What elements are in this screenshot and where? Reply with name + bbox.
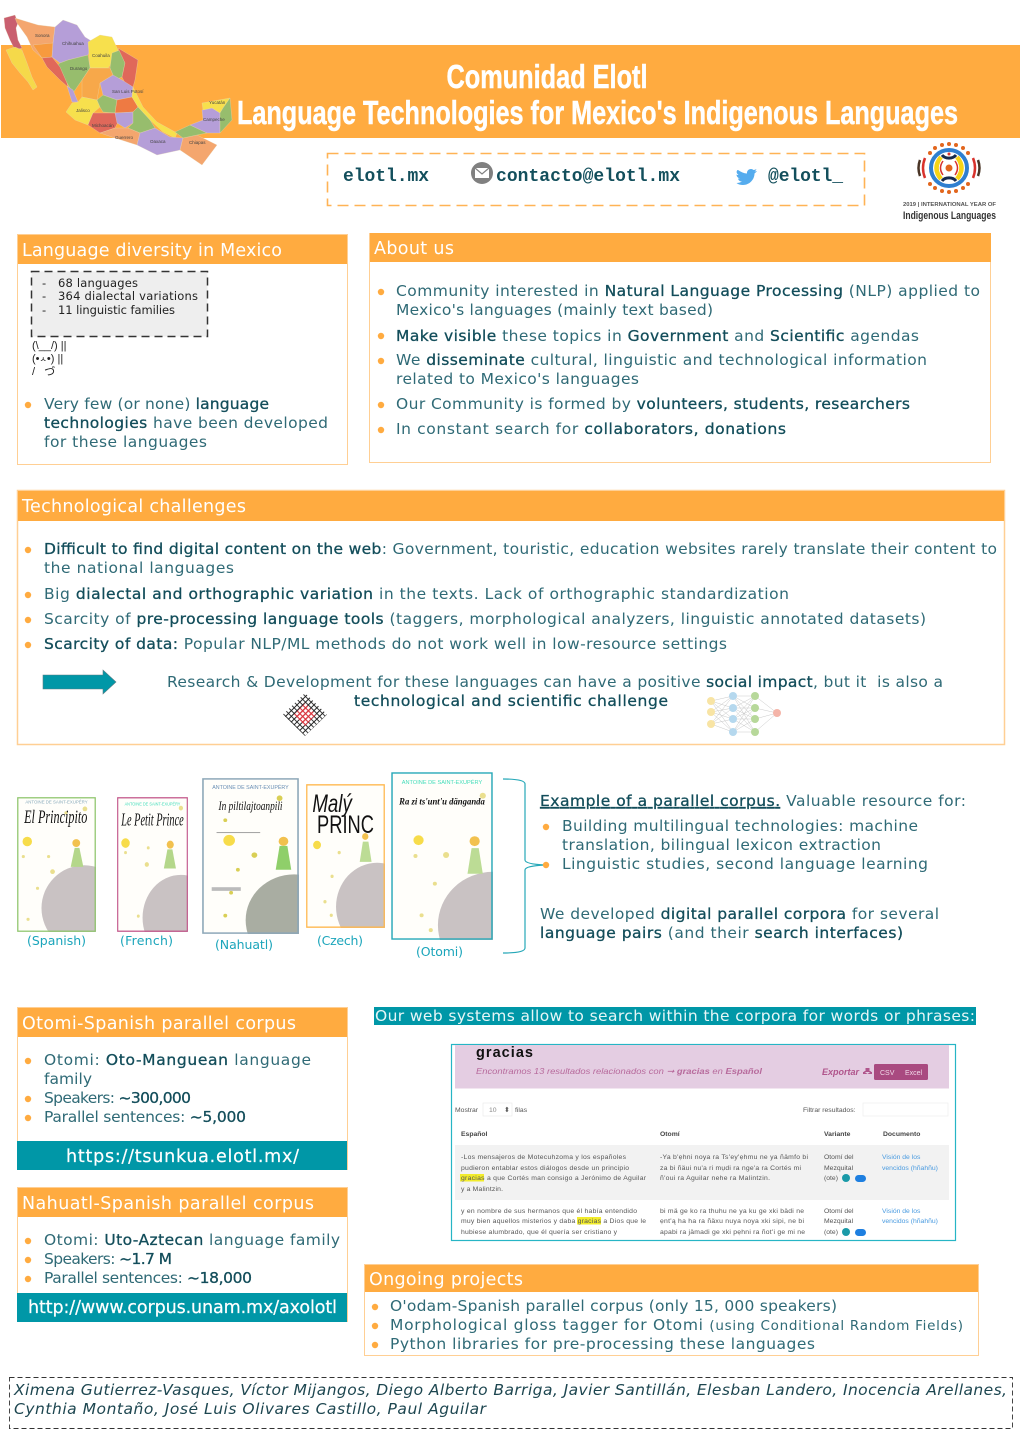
table: y en nombre de sus hermanos que él había entendido xyxy=(461,1208,637,1215)
map of Mexico: Chiapas xyxy=(189,140,206,145)
panel: about us xyxy=(370,233,991,462)
book: Spanish xyxy=(17,797,127,951)
panel: Nahuatl-Spanish corpus xyxy=(17,1188,348,1322)
book: Czech xyxy=(306,784,418,951)
map of Mexico: Oaxaca xyxy=(150,139,166,144)
panel: Otomi-Spanish corpus: family xyxy=(44,1070,92,1088)
arrow xyxy=(43,670,116,694)
contact box: @elotl_ xyxy=(768,167,843,187)
table: Mezquital xyxy=(824,1218,854,1225)
map of Mexico: Coahuila xyxy=(92,53,110,58)
logo: International Year of Indigenous Languages: Indigenous Languages xyxy=(903,210,996,222)
contact box xyxy=(328,154,864,206)
bullet text: technologies have been developed xyxy=(44,414,328,432)
dashed stats box: 68 languages xyxy=(58,276,138,290)
map of Mexico: Campeche xyxy=(203,117,225,122)
panel: about us: related to Mexico's languages xyxy=(396,370,639,388)
panel: about us: In constant search for collaborators, donations xyxy=(396,420,786,438)
authors: Cynthia Montaño, José Luis Olivares Castillo, Paul Aguilar xyxy=(14,1400,488,1418)
table: Otomí xyxy=(660,1131,681,1138)
icon: embroidery diamond xyxy=(283,693,327,736)
panel: ongoing projects: O'odam-Spanish parallel corpus (only 15, 000 speakers) xyxy=(390,1297,837,1315)
link band xyxy=(17,1293,347,1322)
table controls: filas xyxy=(515,1107,528,1114)
dashed stats box: - xyxy=(42,276,46,290)
search result header: Excel xyxy=(905,1070,923,1077)
panel: about us: We disseminate cultural, linguistic and technological information xyxy=(396,351,927,369)
panel: ongoing projects: Ongoing projects xyxy=(369,1270,523,1290)
search result header: gracias xyxy=(476,1045,533,1061)
map of Mexico: Michoacán xyxy=(92,123,114,128)
contact box: elotl.mx xyxy=(343,167,429,187)
map of Mexico: Durango xyxy=(70,66,88,71)
impact statement: technological and scientific challenge xyxy=(354,692,668,710)
table: gracias a que Cortés man consigo a Jerónimo de Aguilar xyxy=(461,1175,647,1182)
authors: Ximena Gutierrez-Vasques, Víctor Mijangos, Diego Alberto Barriga, Javier Santillán, Elesban Landero, Inocencia Arellanes, xyxy=(13,1381,1007,1399)
panel: technological challenges xyxy=(18,490,1004,744)
table: Mezquital xyxy=(824,1165,854,1172)
table: -Los mensajeros de Motecuhzoma y los españoles xyxy=(461,1154,627,1161)
panel: about us: Make visible these topics in Government and Scientific agendas xyxy=(396,327,919,345)
panel: Nahuatl-Spanish corpus: Parallel sentences: ~18,000 xyxy=(44,1269,252,1287)
panel: Otomi-Spanish corpus xyxy=(17,1008,348,1170)
book: Otomi: Ra zi ts'unt'u dänganda xyxy=(398,797,485,808)
table controls: 10 xyxy=(489,1107,497,1114)
table: y a Malintzin. xyxy=(461,1186,503,1193)
table: Visión de los xyxy=(882,1208,921,1215)
table: Otomí del xyxy=(824,1154,854,1161)
bracket xyxy=(503,779,545,953)
book: Nahuatl: ANTOINE DE SAINT-EXUPÉRY xyxy=(212,784,289,791)
parallel corpus text: translation, bilingual lexicon extraction xyxy=(562,836,881,854)
table: Español xyxy=(461,1131,488,1138)
panel: about us: Our Community is formed by volunteers, students, researchers xyxy=(396,395,910,413)
impact statement xyxy=(167,673,943,710)
table: ñ'oui ra Aguilar nehe ra Malintzin. xyxy=(660,1175,770,1182)
label: (French) xyxy=(120,933,173,948)
header band xyxy=(1,45,1020,138)
table: pudieron entablar estos diálogos desde un principio xyxy=(461,1165,629,1172)
table: -Ya b'ẹhni noya ra Ts'ey'ẹhmu ne ya ñämfo bi xyxy=(660,1154,808,1161)
table: bi mä ge ko ra thuhu ne ya ku ge xki bädi ne xyxy=(660,1208,804,1215)
table controls: ⬍ xyxy=(504,1106,510,1114)
link band: https://tsunkua.elotl.mx/ xyxy=(66,1147,299,1167)
search result header: CSV xyxy=(880,1070,895,1077)
parallel corpus text xyxy=(540,792,966,942)
heading: web systems: Our web systems allow to search within the corpora for words or phrases: xyxy=(375,1007,975,1025)
label: (Czech) xyxy=(317,933,363,948)
map of Mexico: Jalisco xyxy=(76,108,90,113)
panel: ongoing projects xyxy=(364,1264,978,1356)
parallel corpus text: Building multilingual technologies: machine xyxy=(562,817,918,835)
table: ẹnt'ą ha ha ra ñäxu nuya noya xki sipi, ne bi xyxy=(660,1218,804,1225)
book: Spanish: El Principito xyxy=(23,807,87,828)
book: Nahuatl xyxy=(202,778,343,966)
icon: neural network xyxy=(707,692,781,736)
search result header: Exportar xyxy=(822,1067,860,1077)
title: Comunidad Elotl xyxy=(446,58,648,95)
panel: technological challenges: Big dialectal and orthographic variation in the texts. Lack of orthographic standardization xyxy=(44,585,789,603)
map of Mexico: Chihuahua xyxy=(62,41,84,46)
table controls: Mostrar xyxy=(455,1107,479,1114)
table: za bi ñäui nu'a ri mụdi ra nge'a ra Cortés mi xyxy=(660,1165,801,1172)
bullet text: for these languages xyxy=(44,433,207,451)
link band xyxy=(17,1141,347,1170)
table: vencidos (hñahñu) xyxy=(882,1165,938,1172)
table: apabi ra jämadi ge xki pẹhni ra ñot'i ge mi ne xyxy=(660,1229,805,1236)
panel: technological challenges: Difficult to find digital content on the web: Government, touristic, education websites rarely translate their content to xyxy=(44,540,997,558)
table: muy bien aquellos misterios y daba gracias a Dios que le xyxy=(461,1218,646,1225)
panel: Nahuatl-Spanish corpus: Speakers: ~1.7 M xyxy=(44,1250,172,1268)
dashed stats box: - xyxy=(42,303,46,317)
table: Visión de los xyxy=(882,1154,921,1161)
book: Otomi: ANTOINE DE SAINT-EXUPÉRY xyxy=(402,779,483,786)
parallel corpus text: Example of a parallel corpus. Valuable resource for: xyxy=(540,792,966,810)
table: hubiese alumbrado, que él quería ser cristiano y xyxy=(461,1229,618,1236)
book: Nahuatl: In piltilajtoanpili xyxy=(218,798,283,813)
panel: ongoing projects: Python libraries for pre-processing these languages xyxy=(390,1335,815,1353)
map of Mexico xyxy=(4,15,232,165)
dashed stats box: 11 linguistic families xyxy=(58,303,175,317)
ascii bunny xyxy=(32,340,66,378)
table xyxy=(455,1131,949,1236)
book: Czech: Malý xyxy=(312,790,353,818)
table: (ote) xyxy=(824,1229,838,1236)
table controls xyxy=(455,1103,948,1116)
logo: International Year of Indigenous Languages: 2019 | INTERNATIONAL YEAR OF xyxy=(903,202,997,208)
parallel corpus text: We developed digital parallel corpora for several xyxy=(540,905,939,923)
bullet text xyxy=(25,395,328,451)
contact box: contacto@elotl.mx xyxy=(496,167,680,187)
panel: ongoing projects: Morphological gloss tagger for Otomi (using Conditional Random Fields) xyxy=(390,1316,963,1334)
search result header: Encontramos 13 resultados relacionados con ➞ gracias en Español xyxy=(476,1066,763,1076)
icon: mail xyxy=(471,162,493,184)
book: French: Le Petit Prince xyxy=(121,810,184,830)
impact statement: Research & Development for these languages can have a positive social impact, but it is also a xyxy=(167,673,943,691)
screenshot: search interface xyxy=(452,1044,956,1240)
label: (Spanish) xyxy=(27,933,86,948)
map of Mexico: Yucatán xyxy=(209,100,226,105)
table: Documento xyxy=(883,1131,920,1138)
panel: Otomi-Spanish corpus: Parallel sentences: ~5,000 xyxy=(44,1108,246,1126)
dashed stats box: - xyxy=(42,289,46,303)
dashed stats box: 364 dialectal variations xyxy=(58,289,198,303)
parallel corpus text: language pairs (and their search interfaces) xyxy=(540,924,903,942)
panel: technological challenges: Scarcity of data: Popular NLP/ML methods do not work well in low-resource settings xyxy=(44,635,727,653)
authors xyxy=(10,1378,1012,1428)
panel: about us: Mexico's languages (mainly text based) xyxy=(396,301,713,319)
table: (ote) xyxy=(824,1175,838,1182)
label: (Nahuatl) xyxy=(215,937,273,952)
map of Mexico: San Luis Potosí xyxy=(112,89,144,94)
book: Czech: PRINC xyxy=(317,811,374,839)
panel: Otomi-Spanish corpus: Otomi: Oto-Manguean language xyxy=(44,1051,311,1069)
table: vencidos (hñahñu) xyxy=(882,1218,938,1225)
link band: http://www.corpus.unam.mx/axolotl xyxy=(28,1298,337,1318)
title xyxy=(237,58,958,131)
book: French: ANTOINE DE SAINT-EXUPÉRY xyxy=(125,802,181,807)
parallel corpus text: Linguistic studies, second language learning xyxy=(562,855,928,873)
table: Variante xyxy=(824,1131,851,1138)
panel: technological challenges: Technological challenges xyxy=(21,497,246,517)
bullet text: Very few (or none) language xyxy=(44,395,269,413)
logo: International Year of Indigenous Languages xyxy=(903,142,997,222)
book: Spanish: ANTOINE DE SAINT-EXUPÉRY xyxy=(25,799,88,804)
panel: Otomi-Spanish corpus: Speakers: ~300,000 xyxy=(44,1089,191,1107)
panel: technological challenges: Scarcity of pre-processing language tools (taggers, morphological analyzers, linguistic annotated datasets) xyxy=(44,610,926,628)
table: Otomí del xyxy=(824,1208,854,1215)
search result header xyxy=(455,1045,949,1088)
book: French xyxy=(117,797,219,961)
label: (Otomi) xyxy=(416,944,463,959)
ascii bunny: / づ xyxy=(32,365,55,378)
icon: twitter xyxy=(736,169,757,185)
panel: Nahuatl-Spanish corpus: Otomi: Uto-Aztecan language family xyxy=(44,1231,340,1249)
panel: about us: Community interested in Natural Language Processing (NLP) applied to xyxy=(396,282,980,300)
panel: language diversity: Language diversity in Mexico xyxy=(22,241,282,261)
ascii bunny: (•ㅅ•) || xyxy=(32,353,63,365)
map of Mexico: Sonora xyxy=(35,33,50,38)
panel: Otomi-Spanish corpus: Otomi-Spanish parallel corpus xyxy=(22,1014,296,1034)
book: Otomi xyxy=(391,772,548,979)
table controls: Filtrar resultados: xyxy=(803,1107,856,1114)
ascii bunny: (\__/) || xyxy=(32,340,66,352)
map of Mexico: Guerrero xyxy=(115,135,134,140)
dashed stats box xyxy=(32,272,208,336)
panel: Nahuatl-Spanish corpus: Nahuatl-Spanish parallel corpus xyxy=(22,1194,314,1214)
panel: about us: About us xyxy=(374,239,454,259)
panel: technological challenges: the national languages xyxy=(44,559,234,577)
panel: language diversity xyxy=(18,234,348,464)
